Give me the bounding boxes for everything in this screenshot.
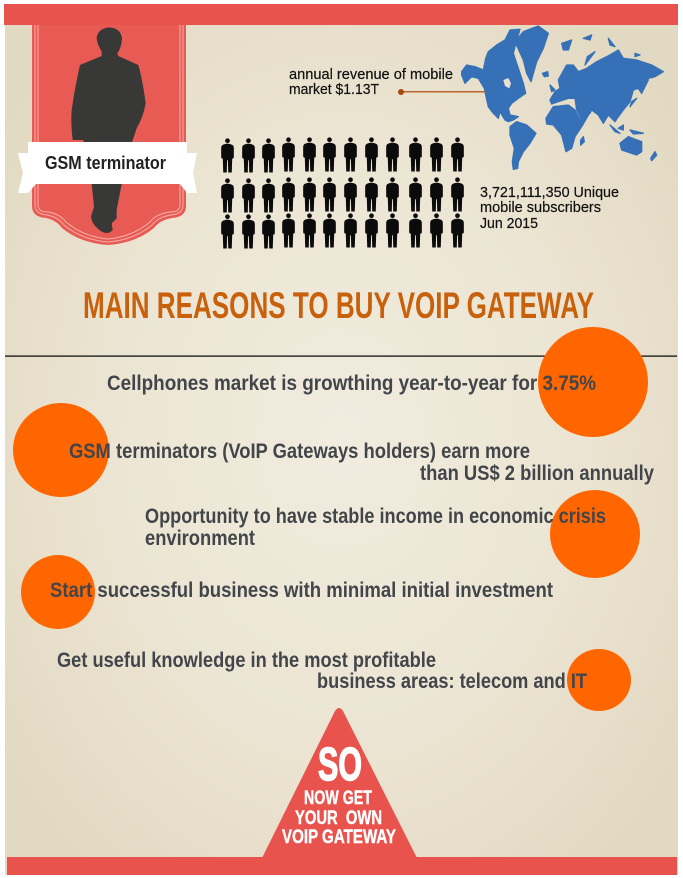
revenue label: annual revenue of mobile: [289, 66, 453, 83]
call to action triangle: [262, 708, 417, 858]
reasons list: [50, 372, 654, 693]
world map: [462, 26, 663, 169]
badge: GSM terminator: [18, 25, 197, 245]
reason 2: than US$ 2 billion annually: [420, 462, 654, 485]
red shield banner: [32, 25, 186, 245]
reason 3: environment: [145, 527, 255, 550]
reason 5: business areas: telecom and IT: [317, 670, 587, 693]
reason 1: Cellphones market is growthing year-to-year for 3.75%: [107, 372, 596, 395]
bottom bar: [7, 857, 677, 875]
orange circles: [13, 327, 648, 711]
call to action text: VOIP GATEWAY: [282, 827, 396, 848]
reason 3: Opportunity to have stable income in economic crisis: [145, 505, 606, 528]
revenue label: market $1.13T: [289, 81, 379, 98]
call to action text: YOUR OWN: [295, 808, 382, 829]
ribbon label: GSM terminator: [45, 153, 166, 173]
connector line to map: [398, 89, 485, 95]
ribbon: [18, 142, 197, 193]
call to action text: NOW GET: [304, 788, 372, 809]
top red bar: [4, 4, 678, 25]
SO: SO: [318, 738, 362, 790]
man silhouette: [71, 27, 146, 233]
subscribers label: 3,721,111,350 Unique: [480, 184, 619, 201]
reason 2: GSM terminators (VoIP Gateways holders) earn more: [69, 440, 530, 463]
people grid: [221, 137, 464, 248]
subscribers label: mobile subscribers: [480, 199, 601, 216]
reason 5: Get useful knowledge in the most profitable: [57, 649, 436, 672]
reason 4: Start successful business with minimal initial investment: [50, 579, 553, 602]
subscribers label: Jun 2015: [480, 215, 538, 232]
